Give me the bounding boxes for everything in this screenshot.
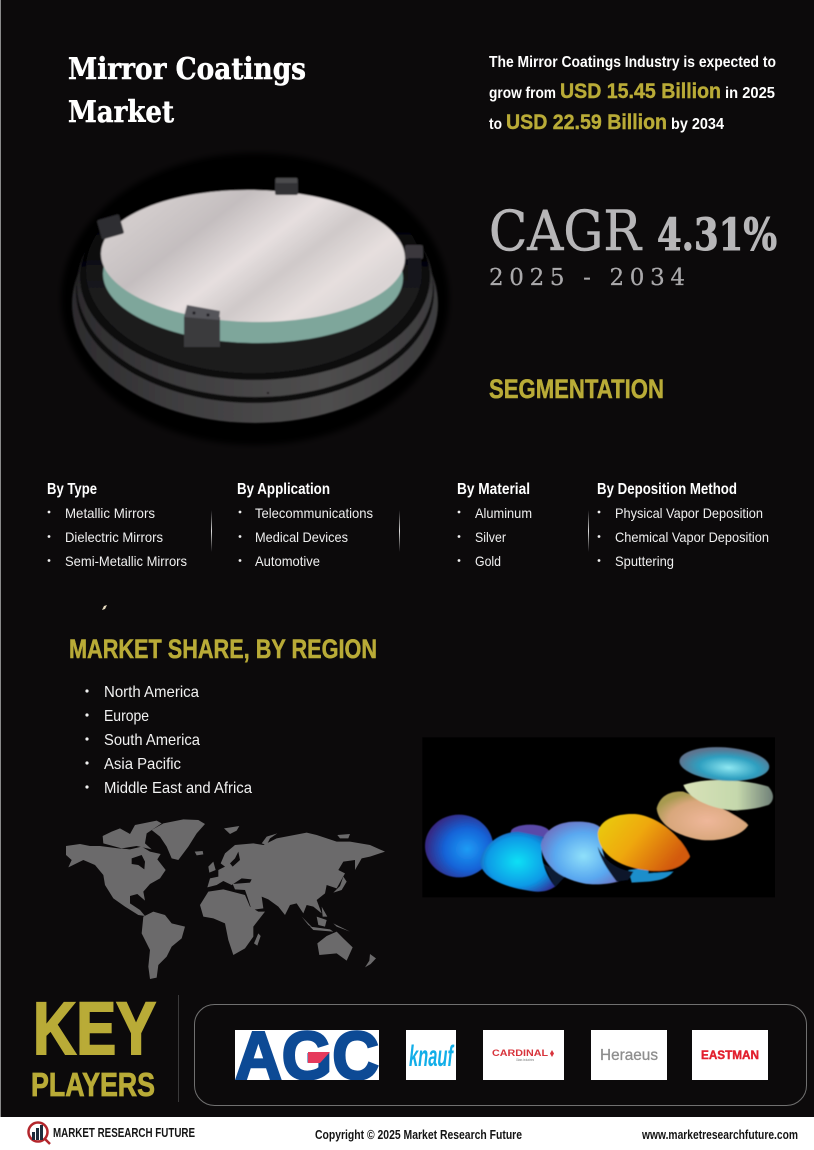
list: application items: Medical Devices (255, 529, 348, 545)
logo: Cardinal: CARDINAL (492, 1048, 548, 1059)
list: deposition items (598, 505, 769, 569)
market forecast text: grow from (489, 85, 556, 102)
list: deposition items: Sputtering (615, 553, 674, 569)
logo: Heraeus: Heraeus (600, 1047, 658, 1064)
panel: by application (237, 481, 373, 569)
CAGR callout: 4.31% (657, 210, 777, 261)
CAGR callout: CAGR (489, 199, 642, 263)
logo: Knauf: knauf (409, 1040, 455, 1073)
icon: market research future logo (28, 1122, 50, 1144)
africa (200, 889, 265, 955)
logo: Eastman: EASTMAN (701, 1048, 759, 1062)
market forecast text: by 2034 (671, 116, 724, 133)
list: material items (458, 505, 532, 569)
icon: top clip (275, 178, 298, 195)
market forecast text: to (489, 116, 502, 133)
icon: left clip (97, 214, 124, 240)
title (68, 52, 306, 130)
heading: by application: By Application (237, 481, 330, 498)
list: application items: Telecommunications (255, 505, 373, 521)
list: deposition items: Chemical Vapor Deposition (615, 529, 769, 545)
heading: market share by region: MARKET SHARE, BY REGION (69, 634, 377, 664)
list: regions: Middle East and Africa (104, 780, 252, 797)
logo: AGC: AGC (235, 1018, 379, 1094)
logo: Knauf (406, 1030, 456, 1080)
list: material items: Silver (475, 529, 506, 545)
new zealand (365, 954, 376, 967)
icon: right clip (405, 245, 423, 284)
list: type items: Metallic Mirrors (65, 505, 155, 521)
list: regions (85, 684, 252, 797)
logo: Heraeus (591, 1030, 667, 1080)
market forecast text: in 2025 (725, 85, 775, 102)
greenland (152, 819, 205, 860)
japan (333, 877, 347, 893)
list: type items (48, 505, 187, 569)
list: regions: Asia Pacific (104, 756, 181, 773)
chart: world map (66, 819, 385, 979)
list: material items: Gold (475, 553, 501, 569)
list: application items (239, 505, 373, 569)
logo: Cardinal: Glass Industries (516, 1058, 534, 1062)
icon: front clip (184, 305, 220, 347)
heading: key players: PLAYERS (31, 1066, 155, 1103)
north america (66, 844, 166, 916)
title: Mirror Coatings (68, 52, 306, 87)
panel: by material (457, 481, 532, 569)
footer (0, 1117, 814, 1150)
list: material items: Aluminum (475, 505, 532, 521)
list: regions: Europe (104, 708, 149, 725)
heading: by material: By Material (457, 481, 530, 498)
market forecast text: USD 15.45 Billion (560, 80, 721, 103)
panel: by type (47, 481, 187, 569)
list: type items: Semi-Metallic Mirrors (65, 553, 187, 569)
madagascar (254, 933, 261, 946)
heading: key players (31, 987, 156, 1103)
heading: by type: By Type (47, 481, 97, 498)
title: Market (68, 95, 174, 130)
list: application items: Automotive (255, 553, 320, 569)
brand name: MARKET RESEARCH FUTURE (53, 1126, 195, 1140)
eurasia (207, 833, 385, 915)
CAGR callout (489, 199, 777, 291)
list: type items: Dielectric Mirrors (65, 529, 163, 545)
market forecast text (489, 54, 776, 134)
logo: AGC (235, 1030, 379, 1080)
logo: Cardinal (483, 1030, 564, 1080)
copyright: Copyright © 2025 Market Research Future (315, 1128, 522, 1142)
australia (317, 932, 353, 961)
heading: segmentation: SEGMENTATION (489, 374, 664, 404)
iceland (195, 851, 203, 855)
image: mounted mirror (60, 153, 450, 445)
logo: Eastman (692, 1030, 768, 1080)
hudson bay (132, 855, 145, 869)
indonesia (302, 917, 350, 932)
panel: by deposition method (597, 481, 769, 569)
heading: key players: KEY (33, 987, 156, 1070)
market forecast text: USD 22.59 Billion (506, 111, 667, 134)
CAGR callout: 2025 - 2034 (489, 265, 685, 291)
market forecast text: The Mirror Coatings Industry is expected to (489, 54, 776, 71)
list: regions: North America (104, 684, 199, 701)
baltic sea (230, 852, 240, 867)
list: deposition items: Physical Vapor Deposition (615, 505, 763, 521)
heading: by deposition method: By Deposition Method (597, 481, 737, 498)
south america (142, 912, 185, 979)
uk (208, 862, 216, 873)
list: regions: South America (104, 732, 200, 749)
image: coated lenses (422, 737, 775, 897)
panel: key player logos (194, 1004, 806, 1106)
